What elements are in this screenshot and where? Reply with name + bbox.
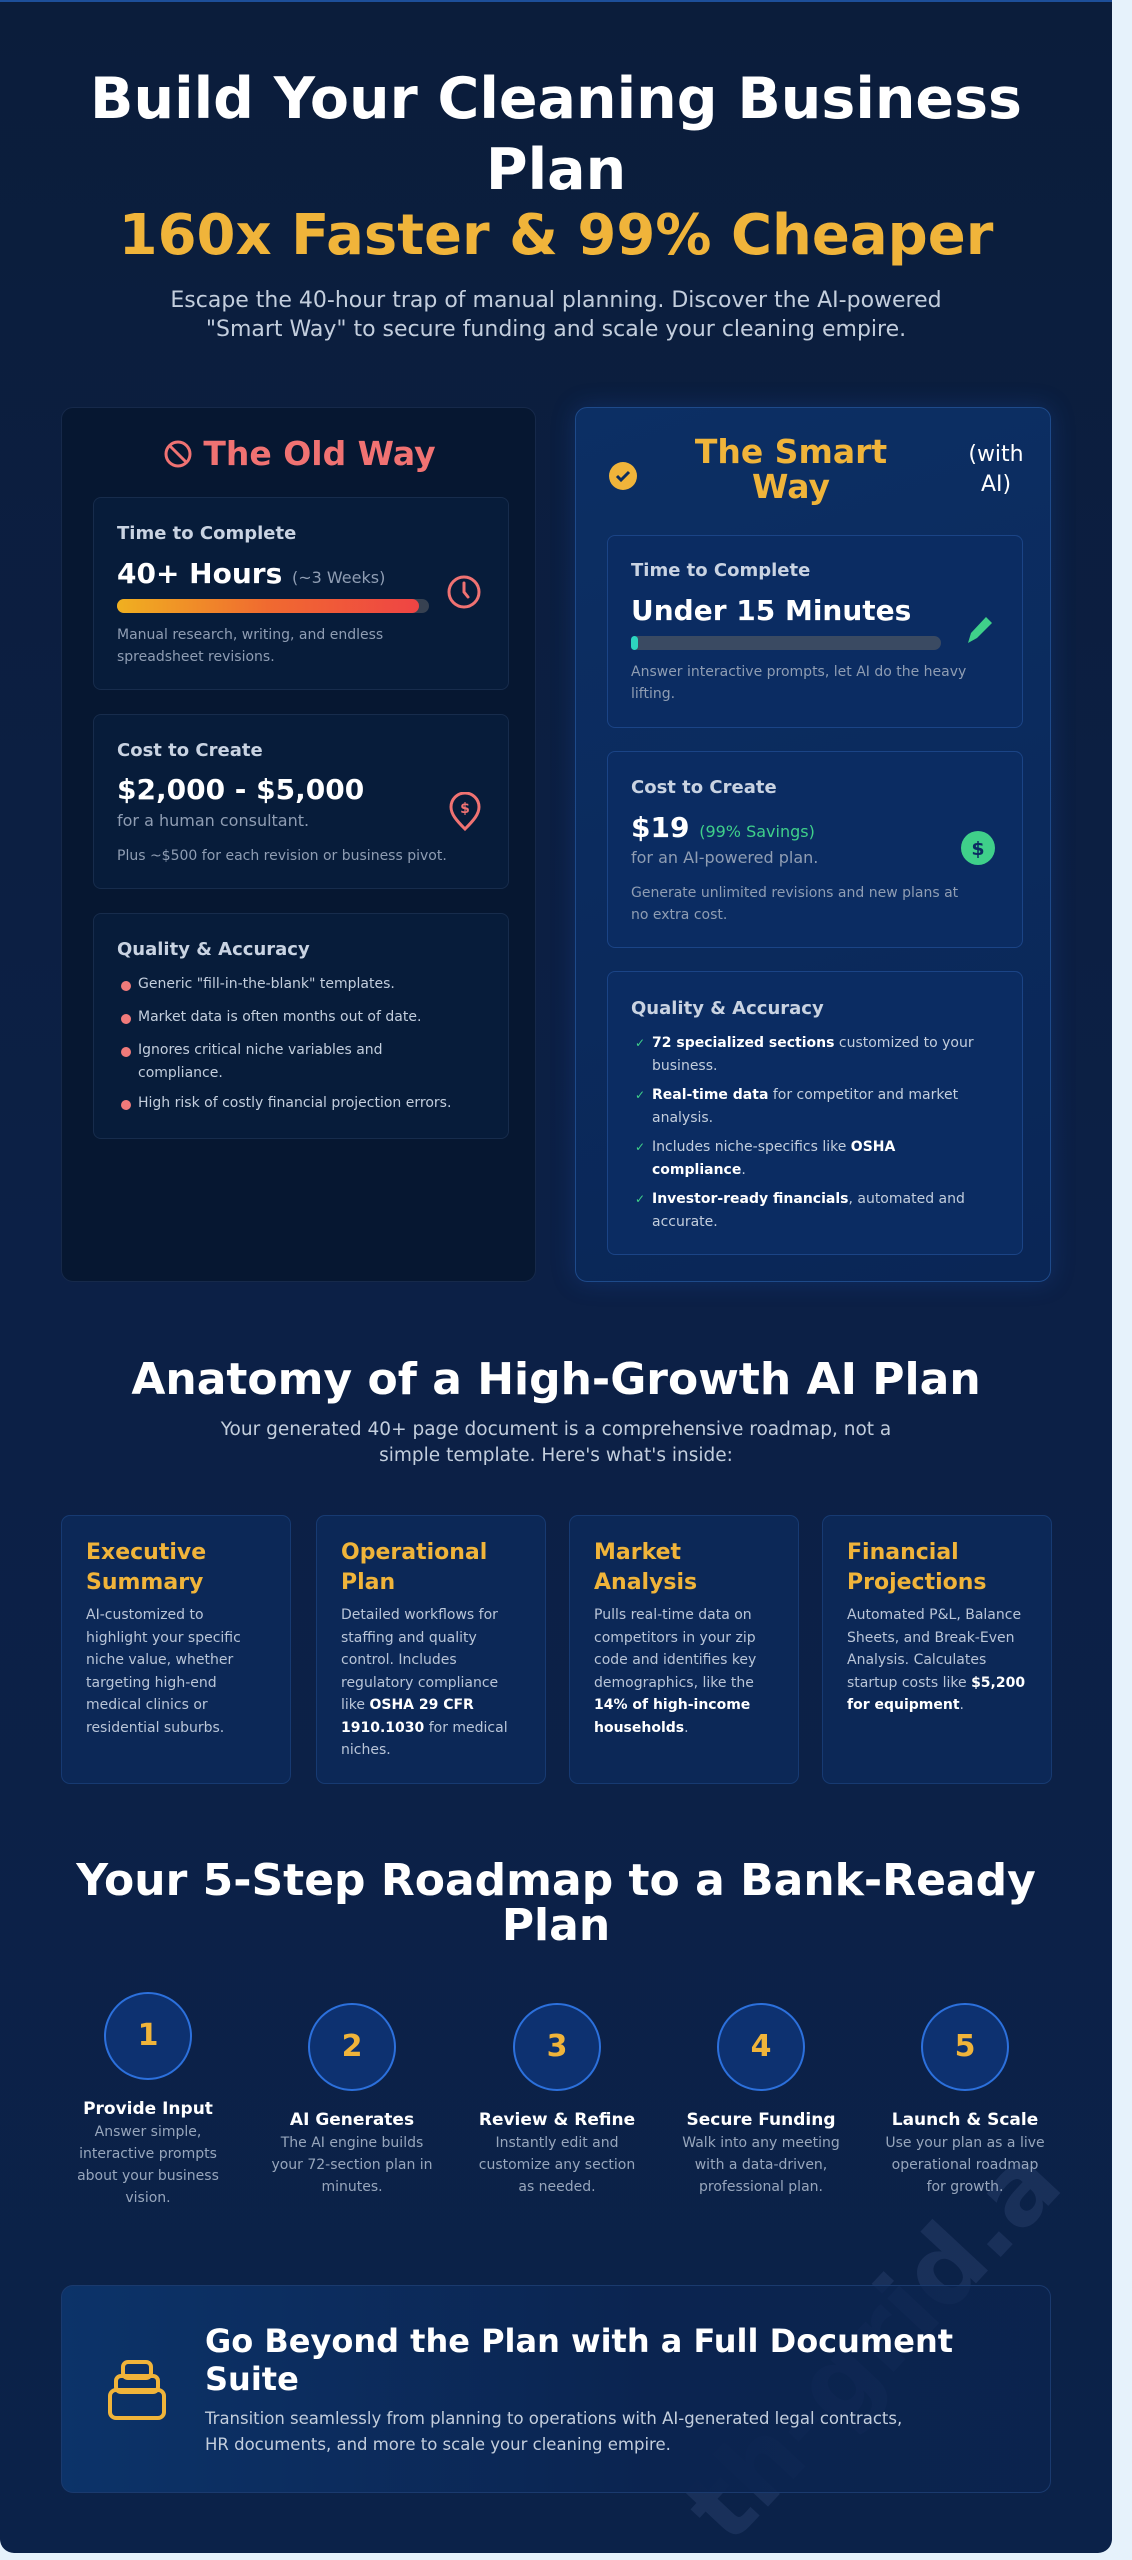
step 5: Use your plan as a live operational roadmap for growth. (885, 2135, 1045, 2195)
subtitle headline: 160x Faster & 99% Cheaper (119, 203, 993, 268)
title: Build Your Cleaning Business (90, 66, 1022, 132)
icon: clock (448, 576, 480, 608)
card: executive summary: AI-customized to highlight your specific niche value, whether targeting high-end medical clinics or residential suburbs. (86, 1607, 241, 1736)
card: quality smart (607, 971, 1023, 1255)
callout: document suite (61, 2285, 1051, 2493)
heading: the smart way: AI) (981, 472, 1011, 497)
card: cost smart: Cost to Create (631, 777, 777, 798)
card: cost old: $2,000 - $5,000 (117, 773, 364, 806)
card: quality smart: Investor-ready financials, automated and accurate. (652, 1191, 965, 1230)
card: quality smart: Real-time data for competitor and market analysis. (652, 1087, 958, 1126)
step 2: AI Generates (290, 2110, 414, 2130)
card: financial projections: Automated P&L, Balance Sheets, and Break-Even Analysis. Calculates startup costs like $5,200 for equipment. (847, 1607, 1025, 1713)
card: quality smart: Quality & Accuracy (631, 998, 824, 1019)
callout text: HR documents, and more to scale your cleaning empire. (205, 2435, 671, 2454)
card: operational plan (316, 1515, 546, 1784)
card: quality old: Ignores critical niche variables and compliance. (138, 1042, 383, 1081)
card: quality smart: ✓ (635, 1192, 645, 1206)
card: operational plan: Plan (341, 1570, 395, 1595)
intro text: Escape the 40-hour trap of manual planning. Discover the AI-powered (170, 288, 942, 313)
step 3: 3 (547, 2029, 567, 2064)
title: Plan (486, 137, 626, 203)
bullet list old: Generic "fill-in-the-blank" templates. (138, 976, 395, 992)
step 4: 4 (751, 2029, 771, 2064)
card: time old (93, 497, 509, 690)
intro text: "Smart Way" to secure funding and scale your cleaning empire. (206, 317, 906, 342)
step 4 (682, 2003, 840, 2195)
heading: roadmap (76, 1855, 1036, 1951)
anatomy subtitle: simple template. Here's what's inside: (379, 1445, 733, 1466)
card: market analysis: Pulls real-time data on competitors in your zip code and identifies key demographics, like the 14% of high-income households. (594, 1607, 756, 1736)
callout text: Transition seamlessly from planning to operations with AI-generated legal contracts, (205, 2409, 902, 2428)
card: financial projections: Financial (847, 1540, 959, 1565)
card: quality smart: ✓ (635, 1140, 645, 1154)
icon: pencil (968, 617, 992, 643)
card: cost old: Plus ~$500 for each revision or business pivot. (117, 848, 447, 864)
card: quality old: Quality & Accuracy (117, 939, 310, 960)
step 5 (885, 2003, 1045, 2195)
watermark: th-grid.a (662, 2124, 1083, 2553)
anatomy subtitle (220, 1419, 891, 1466)
anatomy subtitle: Your generated 40+ page document is a comprehensive roadmap, not a (221, 1419, 891, 1440)
card: financial projections: Projections (847, 1570, 987, 1595)
icon: savings: $ (971, 838, 985, 860)
panel: the smart way (575, 407, 1051, 1282)
card: time old: Manual research, writing, and endless (117, 627, 383, 643)
card: cost smart (607, 751, 1023, 948)
card: quality old: High risk of costly financial projection errors. (138, 1095, 451, 1111)
card: quality smart: Includes niche-specifics like OSHA compliance. (652, 1139, 895, 1178)
card: market analysis: Market (594, 1540, 681, 1565)
card: time smart: lifting. (631, 686, 675, 702)
card: market analysis: Analysis (594, 1570, 697, 1595)
card: operational plan: Detailed workflows for staffing and quality control. Includes regulatory compliance like OSHA 29 CFR 1910.1030 for medical niches. (341, 1607, 508, 1758)
card: cost smart: no extra cost. (631, 907, 727, 923)
intro text (170, 288, 942, 342)
card: cost smart: Generate unlimited revisions and new plans at (631, 885, 958, 901)
callout text (204, 2409, 902, 2454)
icon: money pin (450, 792, 480, 831)
step 3: Review & Refine (479, 2110, 635, 2130)
card: time smart: Answer interactive prompts, let AI do the heavy (631, 664, 966, 680)
card: time old: Time to Complete (117, 523, 296, 544)
step 5: Launch & Scale (892, 2110, 1038, 2130)
card: time old: 40+ Hours (~3 Weeks) (117, 557, 385, 590)
step 2 (271, 2003, 433, 2195)
card: quality smart: ✓ (635, 1036, 645, 1050)
title (90, 66, 1022, 203)
heading: roadmap: Plan (502, 1900, 610, 1951)
heading: the smart way: Way (752, 467, 830, 506)
card: cost smart: for an AI-powered plan. (631, 848, 818, 867)
card: time old: spreadsheet revisions. (117, 649, 275, 665)
card: cost smart: $19 (99% Savings) (631, 811, 815, 844)
card: cost old: for a human consultant. (117, 811, 309, 830)
card: operational plan: Operational (341, 1540, 487, 1565)
progress bar: old time (117, 599, 429, 613)
card: cost old (93, 714, 509, 889)
step 1 (77, 1992, 219, 2206)
icon: money pin: $ (460, 801, 470, 817)
card: quality old: Market data is often months out of date. (138, 1009, 421, 1025)
step 2: 2 (342, 2029, 362, 2064)
icon: savings (961, 831, 995, 865)
check list smart: 72 specialized sections customized to your business. (652, 1035, 974, 1074)
icon: document stack (108, 2360, 166, 2420)
step 4: Secure Funding (686, 2110, 836, 2130)
heading: the smart way: The Smart (695, 432, 887, 471)
step 1: Answer simple, interactive prompts about your business vision. (77, 2124, 219, 2206)
heading: roadmap: Your 5-Step Roadmap to a Bank-Ready (76, 1855, 1036, 1906)
card: time smart: Time to Complete (631, 560, 810, 581)
card: market analysis (569, 1515, 799, 1784)
card: cost old: Cost to Create (117, 740, 263, 761)
step 1: Provide Input (83, 2099, 213, 2119)
card: quality smart: ✓ (635, 1088, 645, 1102)
heading: the smart way (609, 432, 1024, 506)
step 5: 5 (955, 2029, 975, 2064)
card: time smart: Under 15 Minutes (631, 594, 911, 627)
panel: the old way (61, 407, 536, 1282)
callout heading: Go Beyond the Plan with a Full Document Suite (205, 2322, 953, 2398)
step 4: Walk into any meeting with a data-driven, professional plan. (682, 2135, 840, 2195)
card: executive summary: Summary (86, 1570, 203, 1595)
card: time smart (607, 535, 1023, 728)
card: quality old (93, 913, 509, 1139)
card: executive summary (61, 1515, 291, 1784)
step 3 (479, 2003, 635, 2195)
progress bar: smart time (631, 636, 941, 650)
heading: the smart way: (with (968, 442, 1024, 467)
card: financial projections (822, 1515, 1052, 1784)
step 2: The AI engine builds your 72-section plan in minutes. (271, 2135, 433, 2195)
step 3: Instantly edit and customize any section as needed. (479, 2135, 635, 2195)
heading: anatomy: Anatomy of a High-Growth AI Plan (131, 1354, 981, 1405)
heading: the old way: The Old Way (203, 434, 436, 473)
step 1: 1 (138, 2018, 158, 2053)
card: executive summary: Executive (86, 1540, 206, 1565)
